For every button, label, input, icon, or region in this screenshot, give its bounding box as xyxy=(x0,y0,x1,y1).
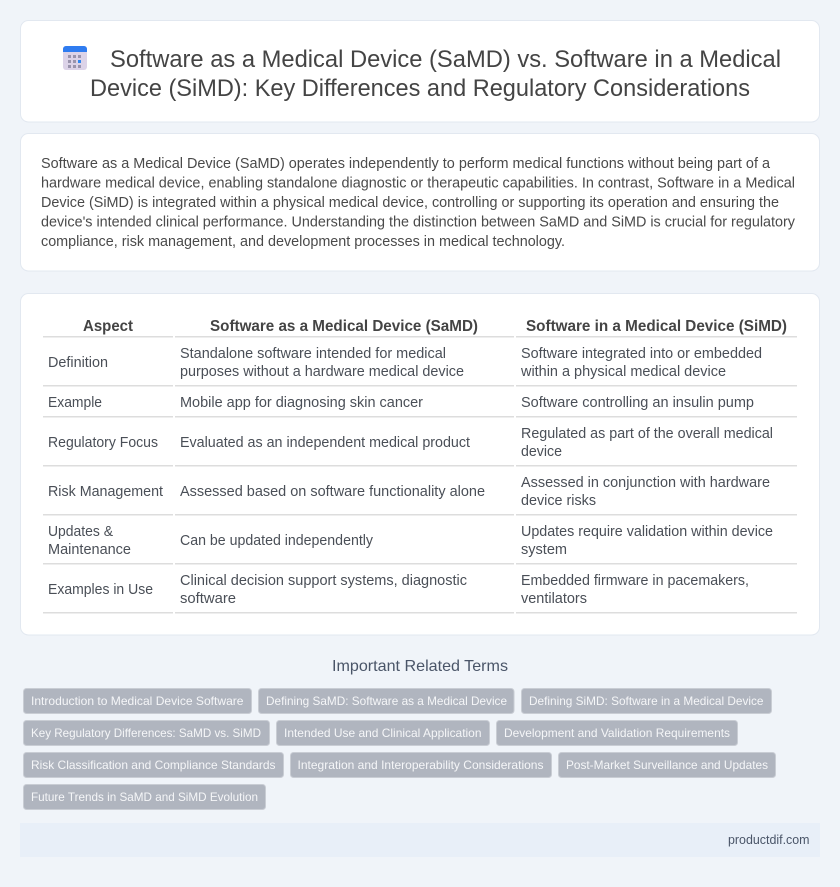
table row: updates and maintenance: Maintenance xyxy=(48,542,131,558)
table row: risk management: Risk Management xyxy=(48,484,163,500)
table row: updates and maintenance: Can be updated independently xyxy=(180,533,374,549)
table row: risk management: Assessed in conjunction with hardware xyxy=(521,475,770,491)
text block: introduction: Device (SiMD) is integrated within a physical medical device, controlling or supporting its operation and ensuring the xyxy=(41,195,779,211)
footer bar xyxy=(20,823,820,857)
panel: title card xyxy=(20,20,820,122)
table row: examples in use: Clinical decision support systems, diagnostic xyxy=(180,573,467,589)
table row: regulatory focus: Evaluated as an independent medical product xyxy=(180,435,470,451)
table row: updates and maintenance: Updates & xyxy=(48,524,113,540)
panel: introduction text xyxy=(20,134,820,271)
text block: introduction xyxy=(41,156,796,250)
panel: related term tags: Intended Use and Clinical Application xyxy=(284,726,482,740)
panel: comparison table xyxy=(20,294,820,635)
table row: risk management: Assessed based on software functionality alone xyxy=(180,484,485,500)
footer bar: productdif.com xyxy=(728,832,810,847)
panel: related term tags: Post-Market Surveillance and Updates xyxy=(566,758,768,772)
table row: risk management xyxy=(43,475,797,516)
text block: introduction: Software as a Medical Device (SaMD) operates independently to perform medical functions without being part of a xyxy=(41,156,770,172)
table row: definition: within a physical medical device xyxy=(520,364,726,380)
title: Device (SiMD): Key Differences and Regulatory Considerations xyxy=(90,75,750,102)
table row: definition: Software integrated into or embedded xyxy=(521,346,762,362)
table row: example: Mobile app for diagnosing skin cancer xyxy=(180,395,423,411)
table row: definition: Definition xyxy=(48,355,108,371)
panel: related term tags: Defining SaMD: Software as a Medical Device xyxy=(266,694,507,708)
panel: related term tags: Key Regulatory Differences: SaMD vs. SiMD xyxy=(31,726,261,740)
panel: related term tags: Development and Validation Requirements xyxy=(504,726,730,740)
table row: example xyxy=(43,395,797,418)
heading: important related terms: Important Related Terms xyxy=(332,658,508,675)
panel: related term tags: Defining SiMD: Software in a Medical Device xyxy=(529,694,764,708)
table row: examples in use: Embedded firmware in pacemakers, xyxy=(521,573,749,589)
table row: example: Example xyxy=(48,395,102,411)
title: Software as a Medical Device (SaMD) vs. Software in a Medical xyxy=(110,46,781,73)
table row: risk management: device risks xyxy=(521,493,596,509)
table row: regulatory focus xyxy=(43,426,797,466)
panel: related term tags: Risk Classification and Compliance Standards xyxy=(31,758,276,772)
text block: introduction: hardware medical device, enabling standalone diagnostic or therapeutic capabilities. In contrast, Software in a Medical xyxy=(41,176,795,192)
table header row: Aspect xyxy=(83,318,134,335)
text block: introduction: compliance, risk management, and development processes in medical technology. xyxy=(41,234,565,250)
table row: definition: Standalone software intended for medical xyxy=(180,346,446,362)
panel: related term tags: Future Trends in SaMD and SiMD Evolution xyxy=(31,790,258,804)
title xyxy=(90,46,781,102)
table row: examples in use: ventilators xyxy=(521,591,587,607)
table row: updates and maintenance: system xyxy=(521,542,567,558)
panel: related term tags: Introduction to Medical Device Software xyxy=(31,694,244,708)
table row: definition: purposes without a hardware medical device xyxy=(180,364,464,380)
table header row: Software as a Medical Device (SaMD) xyxy=(210,318,478,335)
table row: examples in use: Examples in Use xyxy=(48,582,153,598)
table header row xyxy=(43,318,797,338)
table row: examples in use xyxy=(43,573,797,614)
table row: regulatory focus: Regulated as part of the overall medical xyxy=(521,426,773,442)
table row: example: Software controlling an insulin pump xyxy=(521,395,754,411)
table header row: Software in a Medical Device (SiMD) xyxy=(526,318,787,335)
table row: updates and maintenance: Updates require validation within device xyxy=(521,524,773,540)
panel: related term tags: Integration and Interoperability Considerations xyxy=(298,758,544,772)
panel: related term tags xyxy=(24,688,776,810)
icon: calendar xyxy=(63,46,87,70)
table row: updates and maintenance xyxy=(43,524,797,564)
table row: definition xyxy=(43,346,797,386)
text block: introduction: device's intended clinical performance. Understanding the distinction between SaMD and SiMD is crucial for regulatory xyxy=(41,214,796,230)
table row: examples in use: software xyxy=(180,591,236,607)
table row: regulatory focus: device xyxy=(521,444,562,460)
table row: regulatory focus: Regulatory Focus xyxy=(48,435,158,451)
